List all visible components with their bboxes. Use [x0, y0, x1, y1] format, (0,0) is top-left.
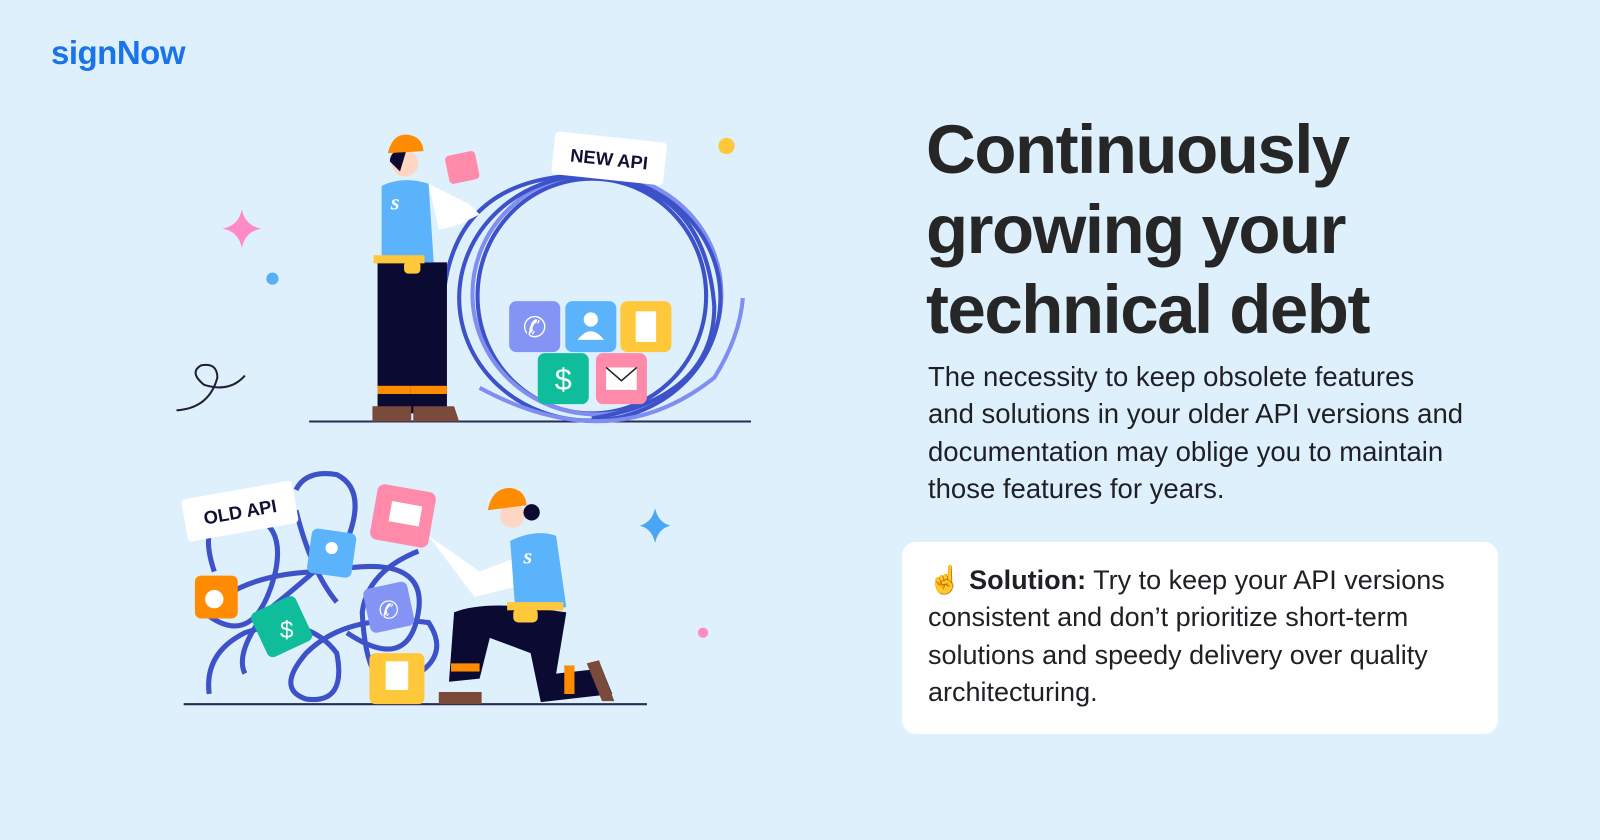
new api label: NEW API: [569, 144, 649, 174]
new api icons: ✆: [523, 312, 547, 344]
title: technical debt: [926, 271, 1369, 348]
description paragraph: documentation may oblige you to maintain: [928, 436, 1443, 467]
solution callout: architecturing.: [928, 677, 1098, 707]
solution callout: solutions and speedy delivery over quality: [928, 640, 1428, 670]
old api icons: ✆: [379, 597, 399, 624]
logo: signNow: [51, 34, 185, 71]
title: growing your: [926, 191, 1345, 268]
ground lines: [184, 422, 751, 704]
man standing: s: [390, 189, 400, 214]
new api coil: [443, 174, 743, 421]
man standing: [372, 135, 480, 422]
description paragraph: The necessity to keep obsolete features: [928, 361, 1414, 392]
new api label: [551, 131, 667, 186]
old api icons: $: [280, 617, 294, 644]
old api icons: [195, 483, 437, 704]
woman kneeling: [429, 488, 614, 704]
title: [926, 111, 1370, 348]
woman kneeling: s: [522, 543, 532, 568]
new api icons: [509, 301, 671, 404]
old api label: OLD API: [202, 495, 278, 529]
description paragraph: those features for years.: [928, 473, 1225, 504]
solution callout: ☝️ Solution: Try to keep your API versions: [928, 565, 1445, 595]
solution callout: consistent and don’t prioritize short-term: [928, 602, 1408, 632]
old api label: [181, 480, 299, 542]
description paragraph: and solutions in your older API versions and: [928, 398, 1463, 429]
solution callout: [902, 542, 1498, 734]
description paragraph: [928, 361, 1463, 504]
new api icons: $: [555, 363, 572, 397]
title: Continuously: [926, 111, 1349, 188]
old api tangle: [204, 474, 437, 700]
decorations: [177, 138, 735, 638]
